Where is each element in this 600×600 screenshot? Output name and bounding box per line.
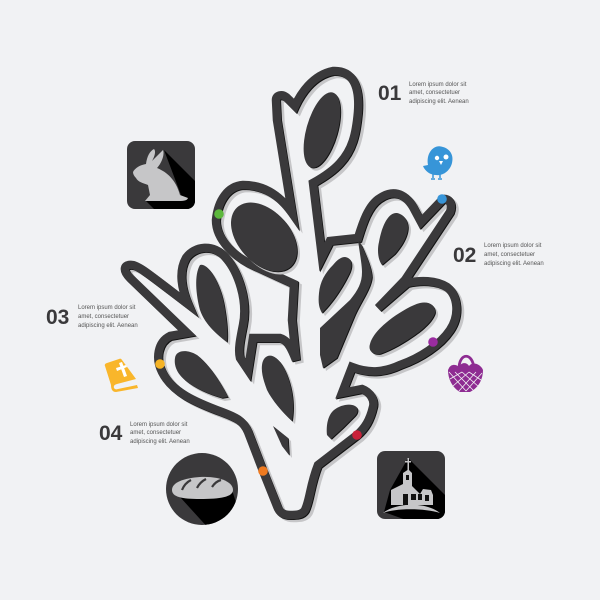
step 03 text: Lorem ipsum dolor sit	[78, 305, 136, 311]
icon: book	[105, 359, 138, 392]
icon: rabbit	[127, 141, 195, 209]
icon: chick	[423, 146, 453, 179]
tree line diagram	[125, 71, 460, 518]
step 01 text: adipiscing elit. Aenean	[409, 99, 469, 105]
step 02 text: Lorem ipsum dolor sit	[484, 243, 542, 249]
leaves	[175, 88, 438, 458]
step 04 text: adipiscing elit. Aenean	[130, 439, 190, 445]
step 01 text: amet, consectetuer	[409, 90, 460, 96]
step 03 text: 03	[46, 306, 69, 329]
step 02 text: 02	[453, 244, 476, 267]
step 01 text: Lorem ipsum dolor sit	[409, 82, 467, 88]
icon: basket	[448, 356, 483, 392]
icon: bread	[166, 453, 238, 525]
step 03 text: adipiscing elit. Aenean	[78, 323, 138, 329]
step 02 text: amet, consectetuer	[484, 252, 535, 258]
step 03 text	[46, 305, 138, 329]
step 02 text	[453, 243, 544, 267]
step 04 text: amet, consectetuer	[130, 430, 181, 436]
step 01 text	[378, 82, 469, 105]
step 02 text: adipiscing elit. Aenean	[484, 261, 544, 267]
step 04 text: 04	[99, 422, 123, 445]
step 04 text	[99, 422, 190, 445]
marker dots	[155, 194, 447, 476]
infographic canvas	[46, 66, 544, 525]
icon: church	[377, 451, 445, 519]
step 01 text: 01	[378, 82, 402, 105]
step 03 text: amet, consectetuer	[78, 314, 129, 320]
step 04 text: Lorem ipsum dolor sit	[130, 422, 188, 428]
